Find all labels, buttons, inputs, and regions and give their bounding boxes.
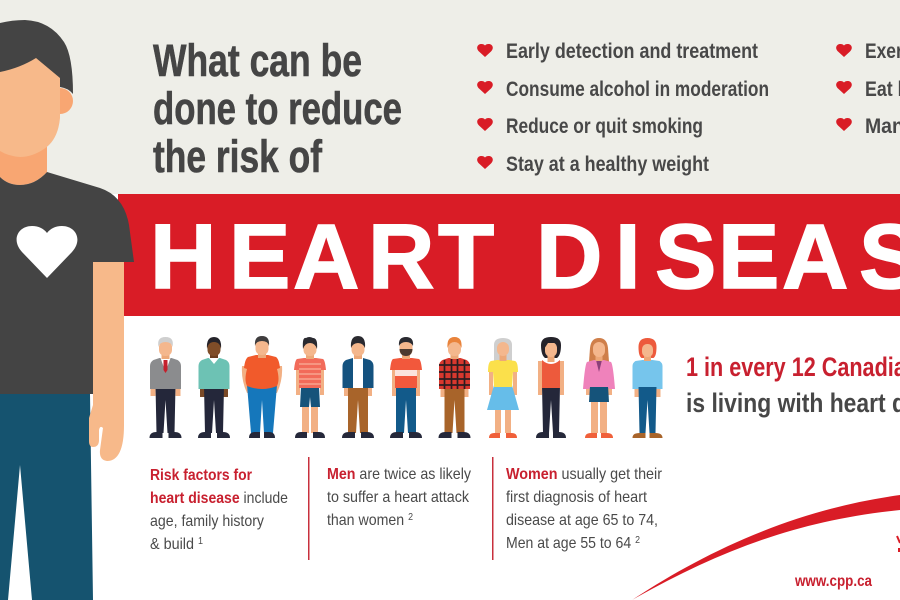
person 2: man in teal sweater [198, 337, 230, 438]
text block: men [327, 466, 471, 529]
text block: women: Men at age 55 to 64 [506, 535, 648, 552]
pants [0, 394, 93, 600]
text block: men: 2 [408, 512, 413, 523]
logo fragment [897, 536, 900, 552]
neck [0, 140, 47, 185]
shirt [0, 172, 134, 394]
person 6: bearded man with orange shirt [390, 337, 422, 438]
website url: www.cpp.ca [794, 573, 872, 590]
text block: women [506, 466, 663, 552]
person 3: heavy man in orange shirt [242, 336, 282, 438]
heading: what can be done: the risk of [153, 131, 323, 182]
list: prevention tips: Early detection and treatment [506, 40, 758, 63]
figure: large man with heart shirt [0, 20, 134, 600]
face [0, 40, 60, 157]
person 7: man in plaid shirt [438, 337, 470, 438]
text block: men: Men are twice as likely [327, 466, 471, 483]
person 10: woman in pink jacket and blue skirt [583, 338, 615, 438]
text block: risk factors [150, 467, 288, 553]
panel: header background [0, 0, 900, 194]
text block: risk factors: heart disease include [150, 490, 288, 507]
text block: risk factors: age, family history [150, 513, 264, 530]
text block: women: disease at age 65 to 74, [506, 512, 658, 529]
swoosh [632, 495, 900, 600]
panel: red banner [118, 194, 900, 316]
callout: 1 in every 12 Canadians [686, 352, 900, 418]
text block: risk factors: 1 [198, 536, 203, 547]
arm and hand [89, 262, 124, 461]
text block: women: 2 [635, 535, 640, 546]
group: row of people [150, 336, 662, 438]
icon: heart on shirt [17, 226, 77, 278]
icons: bullet hearts [477, 44, 852, 169]
text block: women: first diagnosis of heart [506, 489, 647, 506]
text block: risk factors: & build [150, 536, 199, 553]
divider [492, 457, 494, 560]
heading: what can be done: What can be [153, 35, 362, 86]
heading: what can be done: done to reduce [153, 83, 402, 134]
hair [0, 20, 73, 94]
person 5: man in blue jacket [342, 336, 374, 438]
heading: what can be done [153, 35, 402, 182]
person 9: woman in orange top and dark pants [536, 337, 566, 438]
text block: men: to suffer a heart attack [327, 489, 470, 506]
person 11: red-haired woman in light blue [632, 338, 662, 438]
divider [308, 457, 310, 560]
ear [47, 88, 73, 114]
text block: women: Women usually get their [506, 466, 663, 483]
list: prevention tips [506, 40, 900, 176]
person 1: older man in grey vest [150, 337, 182, 438]
list: prevention tips: Reduce or quit smoking [506, 115, 703, 138]
list: prevention tips: Consume alcohol in moderation [506, 78, 769, 101]
person 4: man in striped shirt and shorts [294, 337, 326, 438]
text block: risk factors: Risk factors for [150, 467, 252, 484]
text block: men: than women [327, 512, 414, 529]
list: prevention tips: Stay at a healthy weight [506, 153, 709, 176]
person 8: grey-haired woman in yellow and blue skirt [487, 338, 519, 438]
